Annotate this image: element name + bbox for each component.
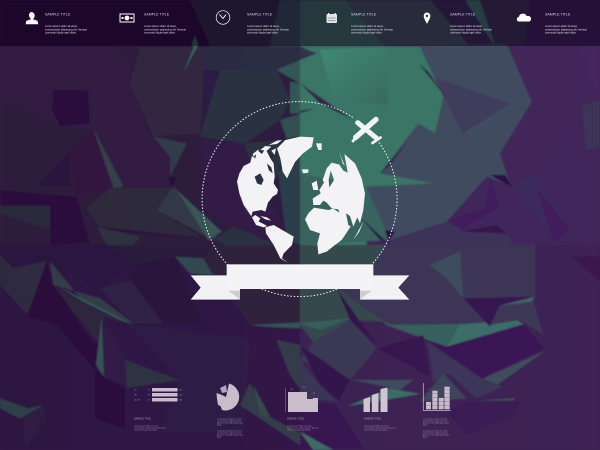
chart: segmented column chart: consectetuer adipiscing elit. <box>423 420 448 422</box>
chart: segmented column chart: Lorem ipsum dolor sit amet, <box>423 430 448 432</box>
chart: horizontal bars: 100 <box>179 390 182 392</box>
chart: step area: SAMPLE TITLE <box>287 418 304 420</box>
item 3: clock: SAMPLE TITLE <box>247 12 273 16</box>
icon: banknote <box>120 14 134 22</box>
North America <box>237 148 278 227</box>
ribbon right tail <box>360 275 409 300</box>
chart: horizontal bars: Lorem ipsum dolor sit amet, <box>134 424 159 428</box>
item 4: calendar: commodo ligula eget dolor. <box>351 31 383 35</box>
chart: rising 3D bars <box>364 388 396 432</box>
ribbon main band <box>227 264 373 289</box>
chart: rising 3D bars: SAMPLE TITLE <box>364 418 381 420</box>
chart: step area: 200 <box>302 387 305 389</box>
dashed orbit circle <box>202 102 397 297</box>
chart: step area: 100 <box>290 389 293 391</box>
chart: pie: Lorem ipsum dolor sit amet, <box>217 418 242 420</box>
item 5: location: consectetuer adipiscing elit. Aenean <box>450 27 493 31</box>
item 2: money: commodo ligula eget dolor. <box>144 31 176 35</box>
chart: horizontal bars: consectetuer adipiscing elit. Aenean <box>134 426 166 430</box>
chart: horizontal bars: 20.5 <box>179 394 182 396</box>
item 1: person: Lorem ipsum dolor sit amet, <box>45 24 78 28</box>
ribbon banner <box>191 264 409 300</box>
item 4: calendar <box>326 12 394 35</box>
eastern hemisphere landmasses <box>302 143 365 254</box>
icon: cloud <box>517 14 531 22</box>
Greenland <box>277 137 314 178</box>
item 5: location: SAMPLE TITLE <box>450 12 476 16</box>
chart: segmented column chart: dolor. <box>423 424 428 426</box>
chart: horizontal bars: 300 <box>179 400 182 402</box>
chart: step area: 30 <box>313 393 315 395</box>
chart: horizontal bars: 30 <box>148 400 150 402</box>
item 1: person: commodo ligula eget dolor. <box>45 31 77 35</box>
ribbon left fold <box>228 291 240 300</box>
item 3: clock <box>216 11 290 35</box>
chart: rising 3D bars: Lorem ipsum dolor sit amet, <box>364 424 389 428</box>
item 5: location: commodo ligula eget dolor. <box>450 31 482 35</box>
chart: pie: Aenean commodo ligula eget <box>217 422 243 424</box>
chart: horizontal bars: abc <box>134 390 137 392</box>
chart: pie <box>216 384 243 438</box>
item 2: money <box>120 12 187 35</box>
item 2: money: consectetuer adipiscing elit. Aenean <box>144 27 187 31</box>
chart: step area: consectetuer adipiscing elit. Aenean <box>287 426 319 430</box>
item 4: calendar: Lorem ipsum dolor sit amet, <box>351 24 384 28</box>
item 3: clock: consectetuer adipiscing elit. Aenean <box>247 27 290 31</box>
chart: segmented column chart <box>423 383 451 438</box>
chart: step area <box>286 387 319 432</box>
chart: pie: Aenean commodo ligula eget <box>217 434 243 436</box>
chart: segmented column chart: Aenean commodo ligula eget <box>423 422 449 424</box>
chart: pie: consectetuer adipiscing elit. <box>217 432 242 434</box>
item 3: clock: commodo ligula eget dolor. <box>247 31 279 35</box>
chart: pie: Lorem ipsum dolor sit amet, <box>217 430 242 432</box>
chart: pie: dolor. <box>217 424 222 426</box>
ribbon right fold <box>360 291 372 300</box>
chart: horizontal bars: 10 <box>148 390 150 392</box>
globe <box>237 137 365 263</box>
chart: segmented column chart: consectetuer adipiscing elit. <box>423 432 448 434</box>
Eurasia and Africa <box>305 154 365 254</box>
icon: airplane <box>353 120 380 143</box>
item 6: cloud: Lorem ipsum dolor sit amet, <box>545 24 578 28</box>
western hemisphere landmasses <box>237 137 314 263</box>
chart: rising 3D bars: consectetuer adipiscing elit. Aenean <box>364 426 396 430</box>
Britain, Iceland, Svalbard and limb streaks <box>302 143 363 240</box>
chart: horizontal bars: commodo ligula eget dolor. <box>134 428 158 432</box>
item 1: person: consectetuer adipiscing elit. Aenean <box>45 27 88 31</box>
chart: horizontal bars: 20 <box>148 394 150 396</box>
item 5: location: Lorem ipsum dolor sit amet, <box>450 24 483 28</box>
item 4: calendar: SAMPLE TITLE <box>351 12 377 16</box>
chart: pie: dolor. <box>217 436 222 438</box>
icon: calendar <box>326 13 337 23</box>
icon: person <box>26 12 38 24</box>
item 5: location <box>424 12 493 35</box>
chart: step area: Lorem ipsum dolor sit amet, <box>287 424 312 428</box>
item 2: money: SAMPLE TITLE <box>144 12 170 16</box>
chart: segmented column chart: dolor. <box>423 436 428 438</box>
chart: horizontal bars: abc def <box>134 400 140 402</box>
item 6: cloud: SAMPLE TITLE <box>545 12 571 16</box>
item 1: person <box>26 12 88 35</box>
Cuba <box>260 216 271 221</box>
item 6: cloud: commodo ligula eget dolor. <box>545 31 577 35</box>
item 6: cloud: consectetuer adipiscing elit. Aenean <box>545 27 588 31</box>
item 6: cloud <box>517 12 588 35</box>
chart: pie: consectetuer adipiscing elit. <box>217 420 242 422</box>
icon: map pin <box>424 12 430 24</box>
item 1: person: SAMPLE TITLE <box>45 12 71 16</box>
item 2: money: Lorem ipsum dolor sit amet, <box>144 24 177 28</box>
Arctic islands <box>253 140 282 157</box>
chart: horizontal bars: abc <box>134 394 137 396</box>
chart: segmented column chart: Lorem ipsum dolor sit amet, <box>423 418 448 420</box>
ribbon left tail <box>191 275 240 300</box>
chart: segmented column chart: Aenean commodo ligula eget <box>423 434 449 436</box>
South America <box>265 225 294 263</box>
item 4: calendar: consectetuer adipiscing elit. Aenean <box>351 27 394 31</box>
chart: rising 3D bars: commodo ligula eget dolor. <box>364 428 388 432</box>
top information bar <box>0 0 600 46</box>
icon: clock <box>216 11 230 24</box>
chart: step area: commodo ligula eget dolor. <box>287 428 311 432</box>
item 3: clock: Lorem ipsum dolor sit amet, <box>247 24 280 28</box>
chart: horizontal bars <box>134 388 182 432</box>
chart: horizontal bars: SAMPLE TITLE <box>134 418 151 420</box>
